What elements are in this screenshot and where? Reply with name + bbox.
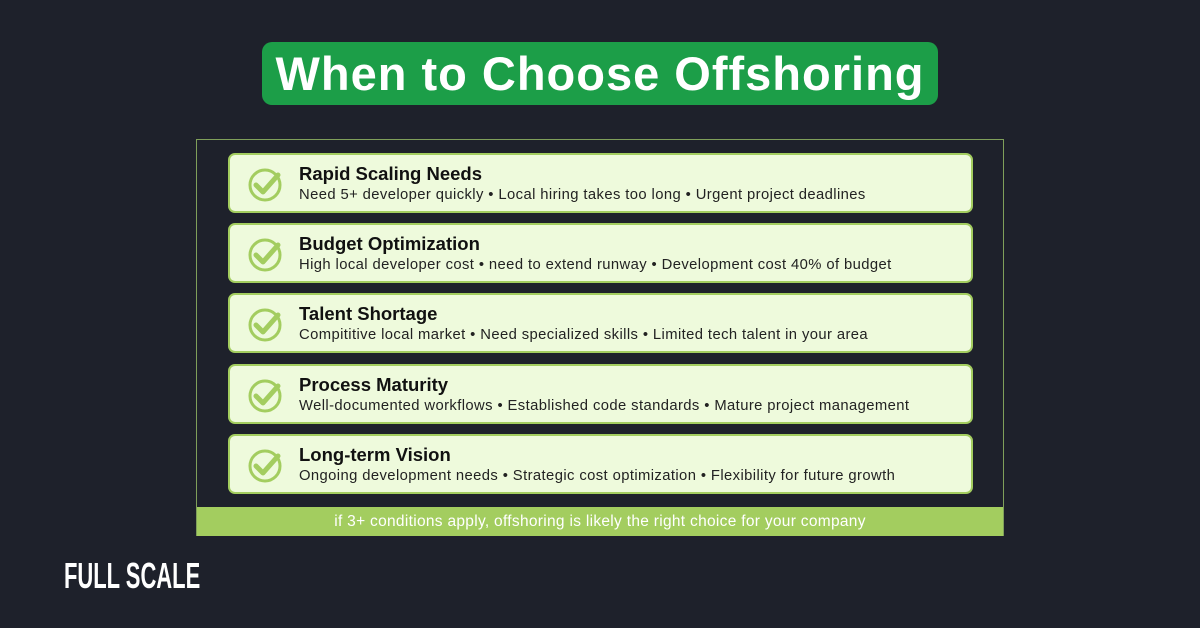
card: rapid scaling: Need 5+ developer quickly • Local hiring takes too long • Urgent project deadlines	[299, 187, 866, 203]
card: budget: High local developer cost • need to extend runway • Development cost 40% of budget	[299, 257, 892, 273]
panel: conditions	[196, 139, 1004, 536]
footer note	[197, 507, 1003, 536]
card: process: Well-documented workflows • Established code standards • Mature project management	[299, 398, 909, 414]
footer note: if 3+ conditions apply, offshoring is likely the right choice for your company	[334, 513, 866, 530]
logo: FULL SCALE	[64, 555, 200, 596]
card: talent: Talent Shortage	[299, 303, 437, 324]
card: long-term: Ongoing development needs • Strategic cost optimization • Flexibility for future growth	[299, 468, 895, 484]
card: talent: Compititive local market • Need specialized skills • Limited tech talent in your area	[299, 327, 868, 343]
card: long-term: Long-term Vision	[299, 444, 451, 465]
card: talent	[228, 293, 973, 353]
card: budget	[228, 223, 973, 283]
card: rapid scaling	[228, 153, 973, 213]
card: process: Process Maturity	[299, 374, 448, 395]
title: When to Choose Offshoring	[276, 47, 924, 100]
card: process	[228, 364, 973, 424]
card: long-term	[228, 434, 973, 494]
card: rapid scaling: Rapid Scaling Needs	[299, 163, 482, 184]
card: budget: Budget Optimization	[299, 233, 480, 254]
